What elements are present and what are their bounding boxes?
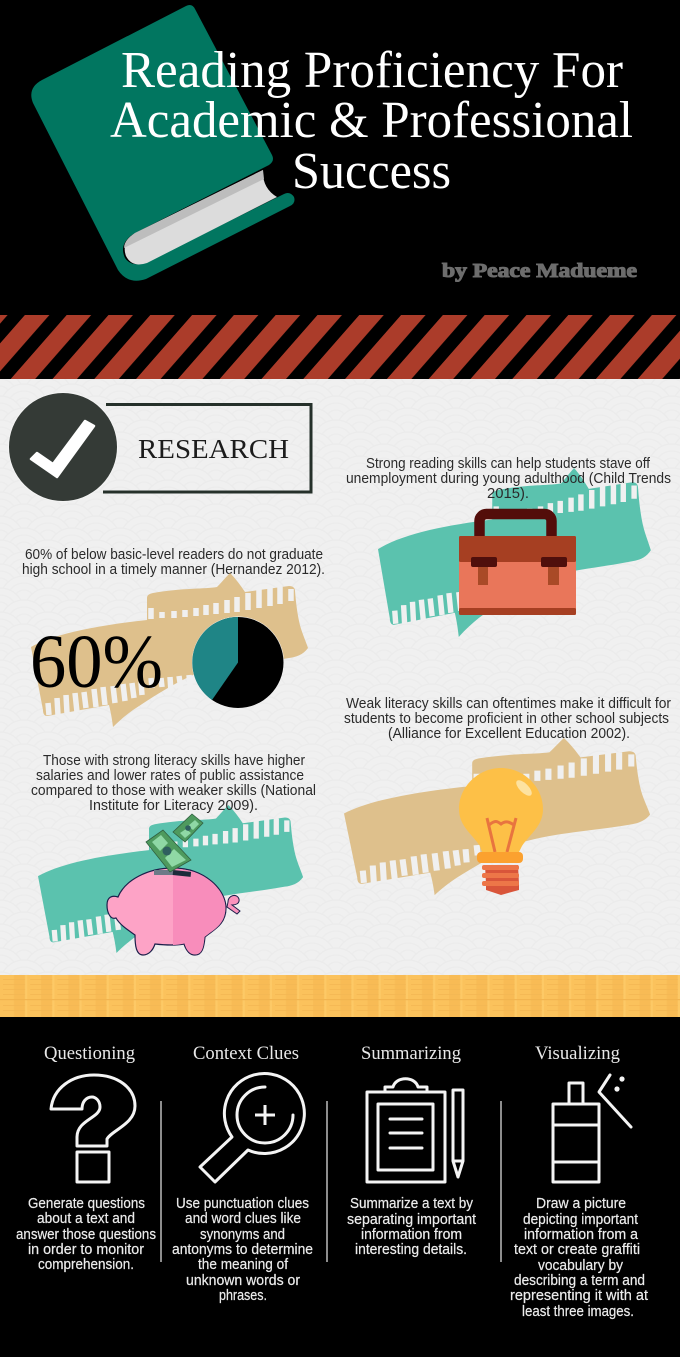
divider lines bbox=[161, 1101, 501, 1262]
ribbon: teal bbox=[38, 805, 303, 953]
text: context clues description: unknown words or bbox=[186, 1273, 300, 1289]
text: context clues description: synonyms and bbox=[200, 1227, 285, 1243]
pie chart 60 percent bbox=[192, 616, 284, 708]
icon: green book bbox=[31, 5, 295, 281]
text: visualizing description: vocabulary by bbox=[538, 1258, 624, 1274]
text: summarizing description: interesting details. bbox=[355, 1242, 467, 1258]
text: salaries: Those with strong literacy skills have higher bbox=[43, 753, 305, 769]
text: context clues description: phrases. bbox=[219, 1288, 267, 1304]
text: graduation: high school in a timely manner (Hernandez 2012). bbox=[22, 562, 325, 578]
text: school subjects: students to become proficient in other school subjects bbox=[344, 711, 669, 727]
text: school subjects: Weak literacy skills can oftentimes make it difficult for bbox=[346, 696, 671, 712]
text: summarizing description: Summarize a text by bbox=[350, 1196, 474, 1212]
text: school subjects: (Alliance for Excellent Education 2002). bbox=[388, 726, 630, 742]
ribbon: teal bbox=[378, 468, 651, 637]
text: questioning description bbox=[16, 1196, 156, 1273]
text: summarizing description bbox=[347, 1196, 476, 1258]
text: visualizing description: information from a bbox=[524, 1227, 639, 1243]
icon: light bulb bbox=[459, 768, 543, 895]
icon: check mark badge bbox=[8, 392, 118, 502]
heading: Summarizing: Summarizing bbox=[361, 1043, 461, 1064]
text: questioning description: Generate questions bbox=[28, 1196, 145, 1212]
text: questioning description: in order to monitor bbox=[28, 1242, 144, 1258]
text: unemployment: unemployment during young adulthood (Child Trends bbox=[346, 471, 671, 487]
panel: unemployment fact bbox=[346, 456, 671, 637]
heading: Visualizing: Visualizing bbox=[535, 1043, 620, 1064]
title: Reading Proficiency For bbox=[121, 42, 623, 99]
icon: piggy bank with money bbox=[107, 814, 240, 955]
text: context clues description bbox=[172, 1196, 313, 1304]
heading: Questioning: Questioning bbox=[44, 1043, 135, 1064]
text: salaries: salaries and lower rates of public assistance bbox=[36, 768, 304, 784]
text: school subjects bbox=[344, 696, 671, 742]
heading frame bbox=[103, 404, 311, 492]
text: visualizing description: text or create graffiti bbox=[514, 1242, 640, 1258]
column: Context Clues bbox=[172, 1043, 313, 1304]
ribbon: tan bbox=[31, 573, 308, 727]
text: visualizing description bbox=[510, 1196, 648, 1320]
ribbon: tan bbox=[344, 738, 650, 895]
text: unemployment: Strong reading skills can help students stave off bbox=[366, 456, 651, 472]
research heading bbox=[8, 392, 311, 502]
text: salaries: compared to those with weaker skills (National bbox=[31, 783, 316, 799]
text: context clues description: and word clues like bbox=[185, 1211, 301, 1227]
panel: weak literacy fact bbox=[344, 696, 671, 895]
text: questioning description: about a text and bbox=[37, 1211, 135, 1227]
icon: magnifying glass bbox=[200, 1074, 304, 1182]
text: questioning description: comprehension. bbox=[38, 1257, 134, 1273]
text: visualizing description: Draw a picture bbox=[536, 1196, 626, 1212]
column: Visualizing bbox=[510, 1043, 648, 1320]
big number 60%: 60% bbox=[30, 620, 163, 704]
research panel background bbox=[0, 379, 680, 975]
column: Summarizing bbox=[347, 1043, 476, 1258]
text: visualizing description: least three images. bbox=[522, 1304, 634, 1320]
text: summarizing description: information from bbox=[361, 1227, 462, 1243]
gold tile band bbox=[0, 975, 680, 1017]
text: unemployment: 2015). bbox=[487, 486, 529, 502]
strategies panel bbox=[0, 1017, 680, 1357]
icon: spray can bbox=[553, 1075, 631, 1182]
icon: clipboard and pencil bbox=[367, 1079, 463, 1182]
diagonal hazard stripe band bbox=[0, 315, 680, 379]
text: context clues description: Use punctuation clues bbox=[176, 1196, 309, 1212]
heading: Context Clues: Context Clues bbox=[193, 1043, 299, 1064]
header background bbox=[0, 0, 680, 315]
author byline: by Peace Madueme bbox=[442, 260, 637, 282]
heading text: RESEARCH bbox=[138, 434, 289, 464]
text: salaries: Institute for Literacy 2009). bbox=[89, 798, 258, 814]
text: graduation bbox=[22, 547, 325, 578]
column: Questioning bbox=[16, 1043, 156, 1273]
text: visualizing description: depicting important bbox=[523, 1212, 638, 1228]
text: questioning description: answer those questions bbox=[16, 1227, 156, 1243]
text: context clues description: antonyms to determine bbox=[172, 1242, 313, 1258]
panel: 60 percent fact bbox=[22, 547, 325, 727]
panel: literacy and salary fact bbox=[31, 753, 316, 955]
text: visualizing description: describing a term and bbox=[514, 1273, 645, 1289]
text: summarizing description: separating important bbox=[347, 1212, 476, 1228]
icon: briefcase bbox=[459, 514, 576, 615]
text: graduation: 60% of below basic-level readers do not graduate bbox=[25, 547, 323, 563]
title: Academic & Professional bbox=[110, 92, 633, 149]
icon: question mark bbox=[51, 1075, 135, 1182]
text: salaries bbox=[31, 753, 316, 814]
text: unemployment bbox=[346, 456, 671, 502]
title bbox=[110, 42, 633, 200]
text: visualizing description: representing it with at bbox=[510, 1288, 648, 1304]
text: context clues description: the meaning of bbox=[198, 1257, 289, 1273]
title: Success bbox=[292, 143, 451, 200]
